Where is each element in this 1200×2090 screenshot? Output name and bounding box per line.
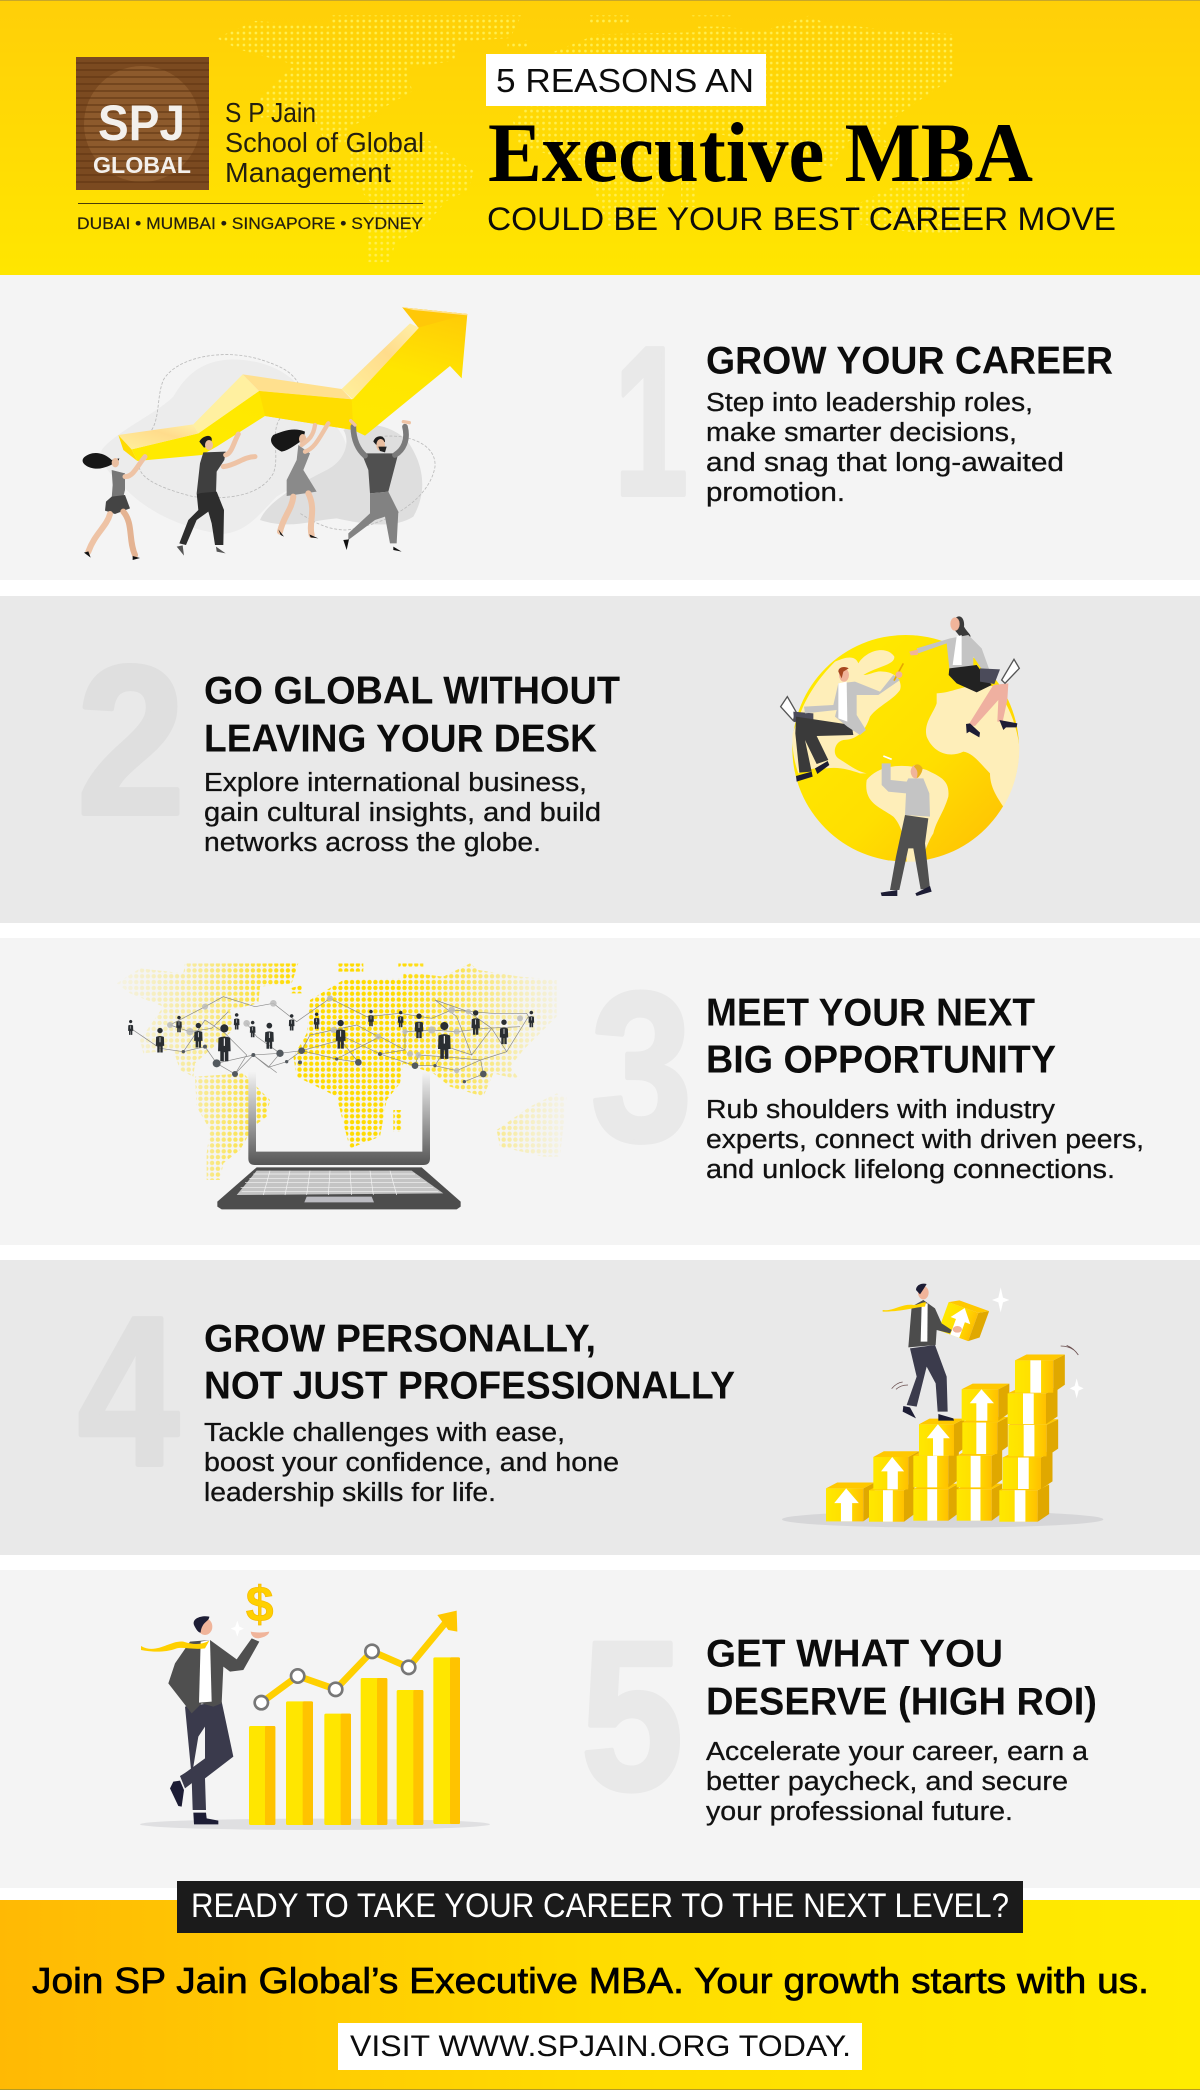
body text [706, 1096, 1144, 1184]
logo: School of Global [225, 127, 424, 158]
panel: go global [0, 596, 1200, 923]
dollar sign: $ [246, 1577, 274, 1633]
join message: Join SP Jain Global’s Executive MBA. Your growth starts with us. [32, 1960, 1149, 2001]
heading: NOT JUST PROFESSIONALLY [204, 1364, 735, 1408]
body text: and snag that long-awaited [706, 449, 1064, 477]
heading [204, 670, 620, 760]
illustration: man with bar chart [140, 1577, 490, 1830]
body text: promotion. [706, 479, 845, 507]
illustration: team lifting arrow [83, 307, 467, 560]
heading: DESERVE (HIGH ROI) [706, 1680, 1097, 1724]
sparkle [231, 1621, 244, 1637]
panel: high roi [0, 1570, 1200, 1888]
illustration: laptop with network map [110, 950, 570, 1209]
seated man with laptop [781, 663, 903, 782]
illustration: globe with people [781, 616, 1019, 896]
heading: GROW YOUR CAREER [706, 340, 1113, 382]
website box: VISIT WWW.SPJAIN.ORG TODAY. [350, 2030, 851, 2063]
dotted world map backdrop [218, 15, 970, 262]
dotted world map [117, 963, 566, 1180]
heading: MEET YOUR NEXT [706, 992, 1035, 1034]
title kicker [486, 54, 766, 106]
body text: leadership skills for life. [204, 1479, 496, 1507]
motion marks [892, 1345, 1078, 1389]
heading [706, 1632, 1097, 1724]
numeral 1: 1 [614, 302, 688, 540]
cube stacks [826, 1355, 1065, 1522]
sparkles [992, 1287, 1084, 1398]
numeral 3: 3 [591, 948, 692, 1185]
call to action banner: READY TO TAKE YOUR CAREER TO THE NEXT LEVEL? [191, 1887, 1009, 1925]
woman 3 [271, 423, 328, 538]
seated woman with laptop [909, 616, 1019, 737]
panel: grow personally [0, 1260, 1200, 1555]
body text: experts, connect with driven peers, [706, 1126, 1144, 1154]
heading: GROW PERSONALLY, [204, 1318, 596, 1360]
body text: Rub shoulders with industry [706, 1096, 1055, 1124]
body text [706, 1738, 1089, 1826]
call to action banner [177, 1881, 1023, 1933]
logo: GLOBAL [93, 152, 191, 178]
body text: Step into leadership roles, [706, 389, 1033, 417]
panel: meet your next big opportunity [0, 938, 1200, 1245]
numeral 4: 4 [78, 1272, 179, 1510]
logo: SPJ [98, 95, 185, 151]
held cube [938, 1297, 989, 1344]
body text: boost your confidence, and hone [204, 1449, 619, 1477]
logo: S P Jain [225, 97, 316, 128]
website box [338, 2023, 862, 2070]
title kicker: 5 REASONS AN [496, 62, 754, 99]
laptop base [217, 1167, 461, 1209]
man [141, 1616, 269, 1824]
heading: GET WHAT YOU [706, 1632, 1003, 1676]
laptop screen [248, 1072, 430, 1165]
logo [76, 57, 424, 233]
body text [706, 389, 1064, 507]
numeral 2: 2 [77, 622, 185, 858]
heading: GO GLOBAL WITHOUT [204, 670, 620, 712]
rising arrow [118, 307, 467, 461]
heading: BIG OPPORTUNITY [706, 1038, 1056, 1082]
panel: footer [0, 1881, 1200, 2090]
woman 1 [83, 453, 145, 560]
man 4 [343, 421, 409, 552]
logo: DUBAI • MUMBAI • SINGAPORE • SYDNEY [77, 215, 423, 233]
body text: better paycheck, and secure [706, 1768, 1068, 1796]
body text: Tackle challenges with ease, [204, 1419, 565, 1447]
body text: and unlock lifelong connections. [706, 1156, 1115, 1184]
body text: your professional future. [706, 1798, 1013, 1826]
body text [204, 769, 601, 857]
body text: networks across the globe. [204, 829, 541, 857]
body text [204, 1419, 619, 1507]
standing man [881, 756, 932, 896]
panel: grow your career [0, 275, 1200, 580]
man [883, 1284, 962, 1421]
network [131, 997, 531, 1082]
numeral 5: 5 [581, 1597, 683, 1834]
panel: header [0, 0, 1200, 275]
body text: Accelerate your career, earn a [706, 1738, 1089, 1766]
business people [128, 1010, 534, 1061]
heading: LEAVING YOUR DESK [204, 718, 597, 760]
logo: Management [225, 157, 391, 188]
body text: Explore international business, [204, 769, 587, 797]
title: Executive MBA [488, 106, 1033, 200]
body text: gain cultural insights, and build [204, 799, 601, 827]
heading [706, 992, 1056, 1082]
heading [204, 1318, 735, 1408]
subtitle: COULD BE YOUR BEST CAREER MOVE [487, 201, 1116, 237]
trend line [255, 1611, 457, 1709]
man 2 [177, 434, 255, 556]
illustration: man stacking cubes [782, 1284, 1103, 1528]
body text: make smarter decisions, [706, 419, 1017, 447]
bars [249, 1657, 460, 1825]
